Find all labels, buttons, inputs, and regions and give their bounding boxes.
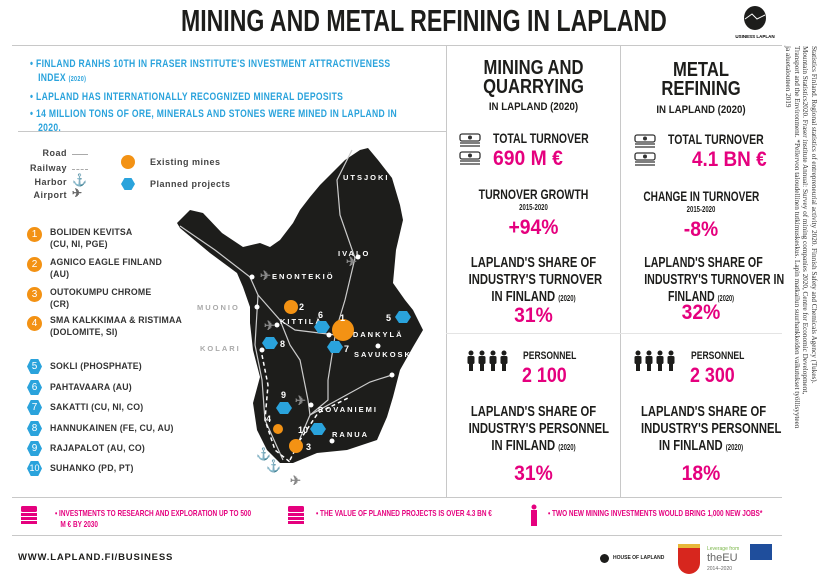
map of Lapland: SAVUKOSKI	[354, 350, 416, 359]
map of Lapland: ✈	[346, 254, 357, 269]
facts list: • LAPLAND HAS INTERNATIONALLY RECOGNIZED MINERAL DEPOSITS	[30, 91, 343, 103]
panel: mining and quarrying: 2015-2020	[519, 203, 548, 212]
panel: metal refining: 32%	[682, 301, 720, 324]
icon: money	[459, 133, 481, 165]
mine list: SAKATTI (CU, NI, CO)	[50, 402, 143, 413]
panel: mining and quarrying: +94%	[509, 216, 558, 239]
map of Lapland: ROVANIEMI	[318, 405, 378, 414]
facts list: INDEX (2020)	[38, 72, 86, 84]
panel: metal refining: TOTAL TURNOVER	[668, 131, 764, 147]
map of Lapland: 5	[386, 313, 391, 323]
sources (rotated): Mountain Statistics2020. Fraser institute Annual: Survey of mining companies 2020, Centre for Economic Development,	[802, 46, 810, 394]
map of Lapland: RANUA	[332, 430, 369, 439]
legend: Railway	[30, 163, 67, 173]
sources (rotated): Transport and the Environment. *Pellervon taloudellinen tutkimuskeskus. Lapin matkailun suurhankkeiden vaikutukset työllisyyteen	[793, 46, 801, 428]
mine list: 2	[32, 259, 37, 270]
footer logos: theEU	[707, 552, 738, 564]
panel: metal refining	[634, 59, 784, 485]
panel: metal refining: IN FINLAND (2020)	[659, 437, 743, 454]
mine list: 3	[32, 289, 37, 300]
panel: metal refining: LAPLAND'S SHARE OF	[641, 403, 766, 420]
legend: Planned projects	[150, 179, 231, 189]
footer url: WWW.LAPLAND.FI/BUSINESS	[18, 552, 173, 563]
bottom banner	[21, 504, 762, 529]
mine list: OUTOKUMPU CHROME	[50, 287, 151, 298]
map of Lapland: 6	[318, 310, 323, 320]
mine list: (CR)	[50, 299, 69, 310]
panel: mining and quarrying: LAPLAND'S SHARE OF	[471, 403, 596, 420]
legend: ⚓	[72, 173, 87, 187]
panel: metal refining: 4.1 BN €	[692, 148, 767, 171]
legend: Road	[42, 148, 67, 158]
title: MINING AND METAL REFINING IN LAPLAND	[181, 3, 667, 38]
facts list: 2020.	[38, 122, 61, 134]
legend: Existing mines	[150, 157, 221, 167]
mine list: 10	[29, 463, 40, 473]
bottom banner: • INVESTMENTS TO RESEARCH AND EXPLORATION UP TO 500	[55, 508, 251, 518]
facts list: • 14 MILLION TONS OF ORE, MINERALS AND STONES WERE MINED IN LAPLAND IN	[30, 108, 397, 120]
legend	[30, 148, 231, 200]
mine list: 8	[32, 423, 37, 434]
panel: mining and quarrying: 2 100	[522, 364, 567, 387]
legend: ✈	[72, 186, 83, 200]
panel: mining and quarrying: TURNOVER GROWTH	[479, 186, 588, 202]
panel: mining and quarrying: IN FINLAND (2020)	[491, 437, 576, 454]
map of Lapland: 9	[281, 390, 286, 400]
map of Lapland: SODANKYLÄ	[338, 330, 404, 339]
bottom banner: • TWO NEW MINING INVESTMENTS WOULD BRING 1,000 NEW JOBS*	[548, 508, 762, 518]
panel: mining and quarrying: INDUSTRY'S TURNOVER	[469, 271, 602, 288]
panel: metal refining: 18%	[682, 462, 720, 485]
mine list: 5	[32, 361, 37, 372]
footer logos: 2014–2020	[707, 566, 732, 572]
mine list: RAJAPALOT (AU, CO)	[50, 443, 145, 454]
facts list: • FINLAND RANHS 10TH IN FRASER INSTITUTE'S INVESTMENT ATTRACTIVENESS	[30, 58, 390, 70]
icon: money	[634, 134, 656, 166]
panel: metal refining: INDUSTRY'S PERSONNEL	[641, 420, 781, 437]
footer logos: Leverage from	[707, 546, 739, 552]
footer logos: HOUSE OF LAPLAND	[613, 555, 664, 561]
panel: mining and quarrying: TOTAL TURNOVER	[493, 130, 589, 146]
map of Lapland: 7	[344, 344, 349, 354]
icon: people	[468, 350, 508, 371]
map of Lapland: 1	[340, 313, 345, 323]
mine list: PAHTAVAARA (AU)	[50, 382, 132, 393]
map of Lapland: ✈	[264, 318, 275, 333]
map of Lapland: MUONIO	[197, 303, 240, 312]
footer logos	[600, 544, 772, 574]
panel: metal refining: -8%	[684, 218, 718, 241]
panel: mining and quarrying	[459, 57, 609, 485]
panel: mining and quarrying: QUARRYING	[483, 76, 584, 98]
map of Lapland: 8	[280, 339, 285, 349]
mine list: (AU)	[50, 269, 69, 280]
mine list	[27, 227, 182, 476]
panel: metal refining: LAPLAND'S SHARE OF	[644, 254, 763, 271]
mine list: AGNICO EAGLE FINLAND	[50, 257, 162, 268]
panel: mining and quarrying: MINING AND	[484, 57, 583, 79]
map of Lapland: ⚓	[256, 447, 271, 461]
sources (rotated)	[784, 46, 818, 428]
sources (rotated): ja aluetalouteen 2019	[784, 46, 792, 107]
mine list: SMA KALKKIMAA & RISTIMAA	[50, 315, 182, 326]
panel: metal refining: 2 300	[690, 364, 735, 387]
mine list: SUHANKO (PD, PT)	[50, 463, 134, 474]
mine list: 6	[32, 382, 37, 393]
mine list: 4	[32, 318, 37, 329]
mine list: (DOLOMITE, SI)	[50, 327, 118, 338]
bottom banner: • THE VALUE OF PLANNED PROJECTS IS OVER 4.3 BN €	[316, 508, 492, 518]
panel: metal refining: 2015-2020	[687, 205, 715, 214]
map of Lapland: ⚓	[266, 459, 281, 473]
icon: people	[634, 350, 674, 371]
panel: mining and quarrying: INDUSTRY'S PERSONNEL	[469, 420, 609, 437]
panel: mining and quarrying: 690 M €	[493, 147, 563, 170]
panel: metal refining: METAL	[673, 59, 729, 81]
map of Lapland: ENONTEKIÖ	[272, 272, 335, 281]
panel: metal refining: PERSONNEL	[691, 350, 744, 362]
mine list: SOKLI (PHOSPHATE)	[50, 361, 142, 372]
map of Lapland: 4	[266, 414, 271, 424]
panel: mining and quarrying: IN LAPLAND (2020)	[489, 101, 578, 113]
mine list: 7	[32, 402, 37, 413]
map of Lapland	[177, 148, 423, 488]
panel: mining and quarrying: 31%	[514, 462, 553, 485]
map of Lapland: IVALO	[338, 249, 370, 258]
panel: mining and quarrying: IN FINLAND (2020)	[491, 288, 576, 305]
panel: metal refining: IN LAPLAND (2020)	[656, 104, 746, 116]
map of Lapland: ✈	[295, 393, 306, 408]
mine list: (CU, NI, PGE)	[50, 239, 108, 250]
panel: mining and quarrying: PERSONNEL	[523, 350, 576, 362]
map of Lapland: ✈	[290, 473, 301, 488]
panel: metal refining: CHANGE IN TURNOVER	[643, 188, 759, 204]
mine list: HANNUKAINEN (FE, CU, AU)	[50, 423, 174, 434]
mine list: 9	[32, 443, 37, 454]
map of Lapland: 3	[306, 442, 311, 452]
map of Lapland: KOLARI	[200, 344, 241, 353]
map of Lapland: KITTILÄ	[280, 317, 323, 326]
map of Lapland: 2	[299, 302, 304, 312]
logo: business lapland	[735, 6, 775, 39]
panel: metal refining: REFINING	[661, 78, 741, 100]
panel: metal refining: INDUSTRY'S TURNOVER IN	[644, 271, 784, 288]
panel: metal refining: FINLAND (2020)	[668, 288, 734, 305]
map of Lapland: ✈	[260, 268, 271, 283]
legend: Airport	[34, 190, 67, 200]
legend: Harbor	[34, 177, 67, 187]
bottom banner: M € BY 2030	[60, 519, 98, 529]
panel: mining and quarrying: LAPLAND'S SHARE OF	[471, 254, 596, 271]
panel: mining and quarrying: 31%	[514, 304, 553, 327]
sources (rotated): Statistics Finland. Regional statistics of entrepreneurial activity 2020. Finnish Safety and Chemicals Agency (Tukes).	[810, 46, 818, 384]
mine list: BOLIDEN KEVITSA	[50, 227, 132, 238]
facts list	[30, 58, 397, 134]
map of Lapland: UTSJOKI	[343, 173, 390, 182]
mine list: 1	[32, 229, 37, 240]
map of Lapland: 10	[298, 425, 308, 435]
